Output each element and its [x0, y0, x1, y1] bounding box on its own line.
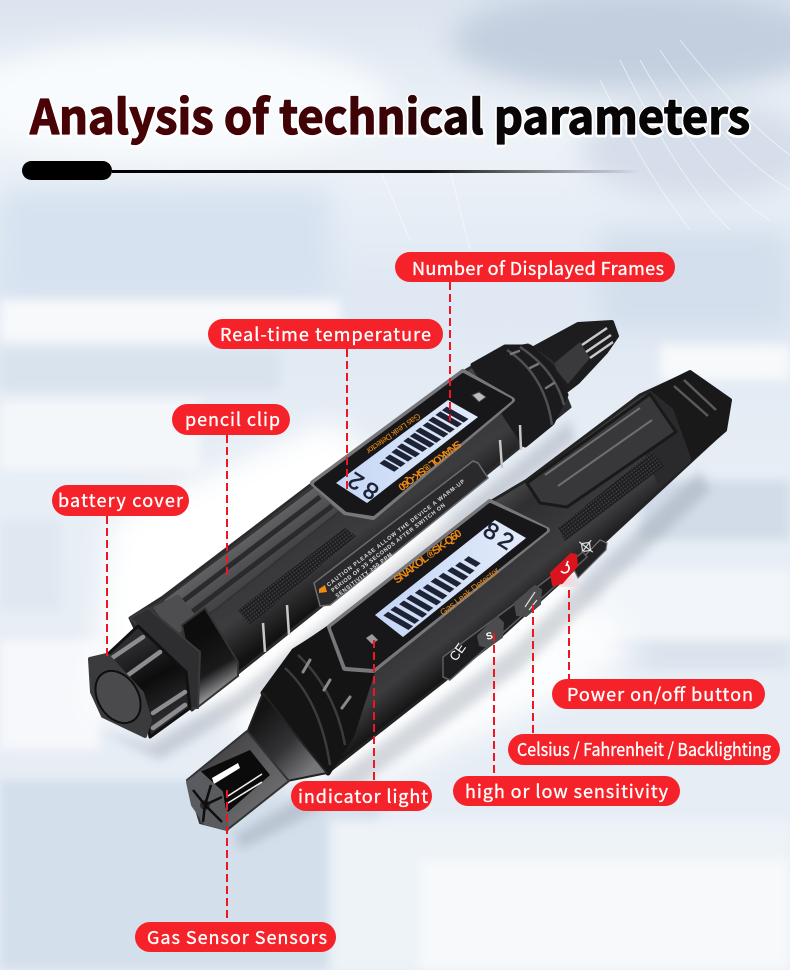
CE panel	[443, 552, 587, 680]
caution panel: CAUTION PLEASE ALLOW THE DEVICE A WARM-UP	[326, 479, 466, 588]
display housing	[313, 372, 512, 517]
collar	[263, 627, 373, 773]
title: Analysis of technical parameters	[29, 79, 750, 148]
callout: pencil clip: pencil clip	[185, 406, 280, 432]
LCD screen	[375, 518, 526, 637]
textured grip	[238, 528, 356, 625]
caution panel: SENSITIVITY ≥50 PPM	[335, 552, 394, 600]
pen shadow	[100, 420, 575, 760]
nose cone	[247, 693, 327, 781]
barrel body	[130, 345, 570, 710]
callout: power button	[552, 590, 765, 709]
battery cover cap	[86, 626, 190, 737]
callout: number of displayed frames	[395, 252, 675, 421]
pencil clip	[527, 394, 676, 507]
product: front detector pen	[187, 372, 730, 850]
rear cap	[632, 372, 730, 486]
pen shadow	[235, 470, 710, 850]
callout: battery cover: battery cover	[58, 487, 184, 513]
caution panel: PERIOD OF 35 SECONDS AFTER SWITCH ON	[330, 503, 447, 594]
sensitivity button	[478, 617, 503, 647]
display housing: Gas Leak Detector	[438, 565, 501, 618]
indicator window	[472, 392, 486, 402]
pencil clip	[155, 482, 345, 634]
unit backlight button	[515, 586, 541, 616]
callout: real-time temperature	[208, 319, 443, 489]
indicator window	[366, 634, 378, 644]
title divider	[22, 161, 640, 180]
callout: power button: Power on/off button	[567, 681, 753, 707]
callout: sensitivity	[453, 633, 680, 806]
barrel body	[293, 372, 730, 773]
callout: gas sensor	[135, 790, 336, 952]
power button	[551, 554, 577, 585]
sensitivity button: S	[485, 630, 495, 643]
sensor tip	[530, 322, 617, 398]
glossy band	[182, 608, 238, 707]
display housing	[330, 502, 547, 670]
icon panel	[573, 540, 607, 578]
callout: number of displayed frames: Number of Displayed Frames	[412, 255, 664, 281]
display housing: Gas Leak Detector	[364, 411, 423, 456]
LCD screen: 82	[477, 518, 518, 558]
collar ridge	[130, 608, 200, 708]
product: rear detector pen	[86, 322, 617, 760]
side highlight grooves	[263, 425, 521, 652]
callout: battery cover	[52, 485, 189, 656]
callout: indicator light	[291, 640, 432, 811]
CE panel: CE	[446, 640, 469, 664]
housing text: SNAKOL ®SK-Q60	[392, 527, 464, 586]
callout: gas sensor: Gas Sensor Sensors	[147, 924, 327, 950]
callout: pencil clip	[172, 404, 290, 576]
callout: real-time temperature: Real-time temperature	[220, 321, 431, 347]
callout: sensitivity: high or low sensitivity	[465, 778, 669, 804]
housing text: SNAKOL ®SK-Q60	[395, 438, 463, 493]
LCD screen: 82	[344, 464, 385, 504]
collar	[473, 347, 566, 445]
gas sensor grille	[187, 731, 289, 830]
cap end face	[86, 663, 150, 731]
callout: indicator light: indicator light	[298, 783, 428, 809]
icon: recycle bin	[579, 540, 593, 554]
LCD screen	[336, 400, 478, 504]
title: Analysis of technical parameters	[29, 80, 750, 149]
callout: unit and backlight	[508, 605, 780, 765]
caution panel	[314, 461, 488, 606]
textured grip	[558, 452, 664, 541]
